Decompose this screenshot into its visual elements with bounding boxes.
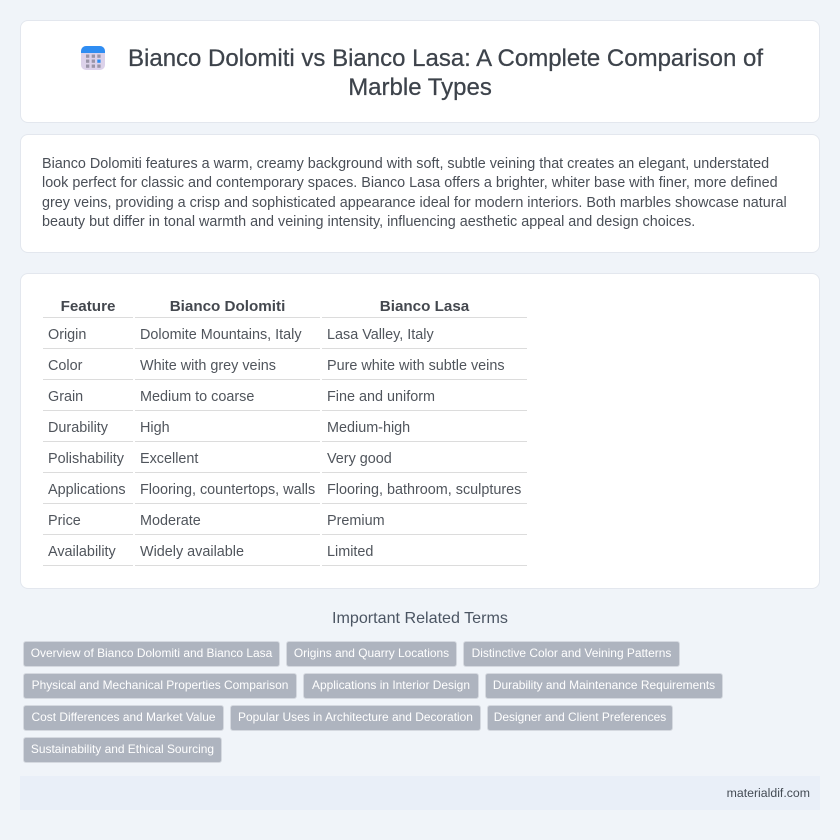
comparison table: Premium bbox=[327, 513, 385, 529]
comparison table: Medium-high bbox=[327, 420, 410, 436]
header panel bbox=[20, 20, 820, 123]
comparison table: Widely available bbox=[140, 544, 244, 560]
comparison table: Moderate bbox=[140, 513, 201, 529]
intro text bbox=[42, 156, 787, 230]
comparison table: High bbox=[140, 420, 170, 436]
comparison table: Fine and uniform bbox=[327, 389, 435, 405]
comparison table: Limited bbox=[327, 544, 373, 560]
comparison table: Very good bbox=[327, 451, 392, 467]
heading: related terms: Important Related Terms bbox=[332, 609, 508, 627]
comparison table: Applications bbox=[48, 482, 126, 498]
intro text: Bianco Dolomiti features a warm, creamy background with soft, subtle veining that creates an elegant, understated bbox=[42, 156, 769, 172]
related term tags: Designer and Client Preferences bbox=[494, 710, 666, 724]
comparison table: Price bbox=[48, 513, 81, 529]
related term tags: Popular Uses in Architecture and Decoration bbox=[238, 710, 473, 724]
intro text: grey veins, providing a crisp and sophisticated appearance ideal for modern interiors. Both marbles showcase natural bbox=[42, 195, 787, 211]
comparison table: Medium to coarse bbox=[140, 389, 254, 405]
related term tags: Physical and Mechanical Properties Comparison bbox=[32, 678, 288, 692]
table panel bbox=[20, 273, 820, 589]
comparison table: Polishability bbox=[48, 451, 124, 467]
comparison table: Flooring, countertops, walls bbox=[140, 482, 315, 498]
footer bar bbox=[20, 776, 820, 810]
related term tags: Origins and Quarry Locations bbox=[294, 646, 449, 660]
related term tags: Sustainability and Ethical Sourcing bbox=[31, 742, 214, 756]
comparison table: Durability bbox=[48, 420, 108, 436]
comparison table: Origin bbox=[48, 327, 86, 343]
intro text: beauty but differ in tonal warmth and veining intensity, influencing aesthetic appeal and design choices. bbox=[42, 214, 695, 230]
related term tags: Durability and Maintenance Requirements bbox=[493, 678, 715, 692]
intro text: look perfect for classic and contemporary spaces. Bianco Lasa offers a brighter, whiter base with finer, more defined bbox=[42, 175, 778, 191]
comparison table: Bianco Dolomiti bbox=[170, 298, 285, 315]
comparison table: Excellent bbox=[140, 451, 198, 467]
comparison table: Flooring, bathroom, sculptures bbox=[327, 482, 521, 498]
comparison table: Lasa Valley, Italy bbox=[327, 327, 434, 343]
intro panel bbox=[20, 134, 820, 253]
footer source: materialdif.com bbox=[727, 786, 810, 800]
title: Bianco Dolomiti vs Bianco Lasa: A Complete Comparison of bbox=[128, 45, 763, 72]
comparison table: Bianco Lasa bbox=[380, 298, 469, 315]
comparison table: Pure white with subtle veins bbox=[327, 358, 505, 374]
related term tags: Overview of Bianco Dolomiti and Bianco Lasa bbox=[31, 646, 272, 660]
title bbox=[128, 45, 764, 101]
comparison table: Availability bbox=[48, 544, 116, 560]
comparison table: White with grey veins bbox=[140, 358, 276, 374]
title: Marble Types bbox=[348, 74, 492, 101]
comparison table: Color bbox=[48, 358, 82, 374]
related term tags: Applications in Interior Design bbox=[312, 678, 470, 692]
comparison table: Grain bbox=[48, 389, 83, 405]
related term tags: Distinctive Color and Veining Patterns bbox=[472, 646, 671, 660]
related term tags: Cost Differences and Market Value bbox=[31, 710, 216, 724]
comparison table: Dolomite Mountains, Italy bbox=[140, 327, 302, 343]
comparison table: Feature bbox=[61, 298, 115, 315]
icon: calendar bbox=[81, 46, 105, 70]
